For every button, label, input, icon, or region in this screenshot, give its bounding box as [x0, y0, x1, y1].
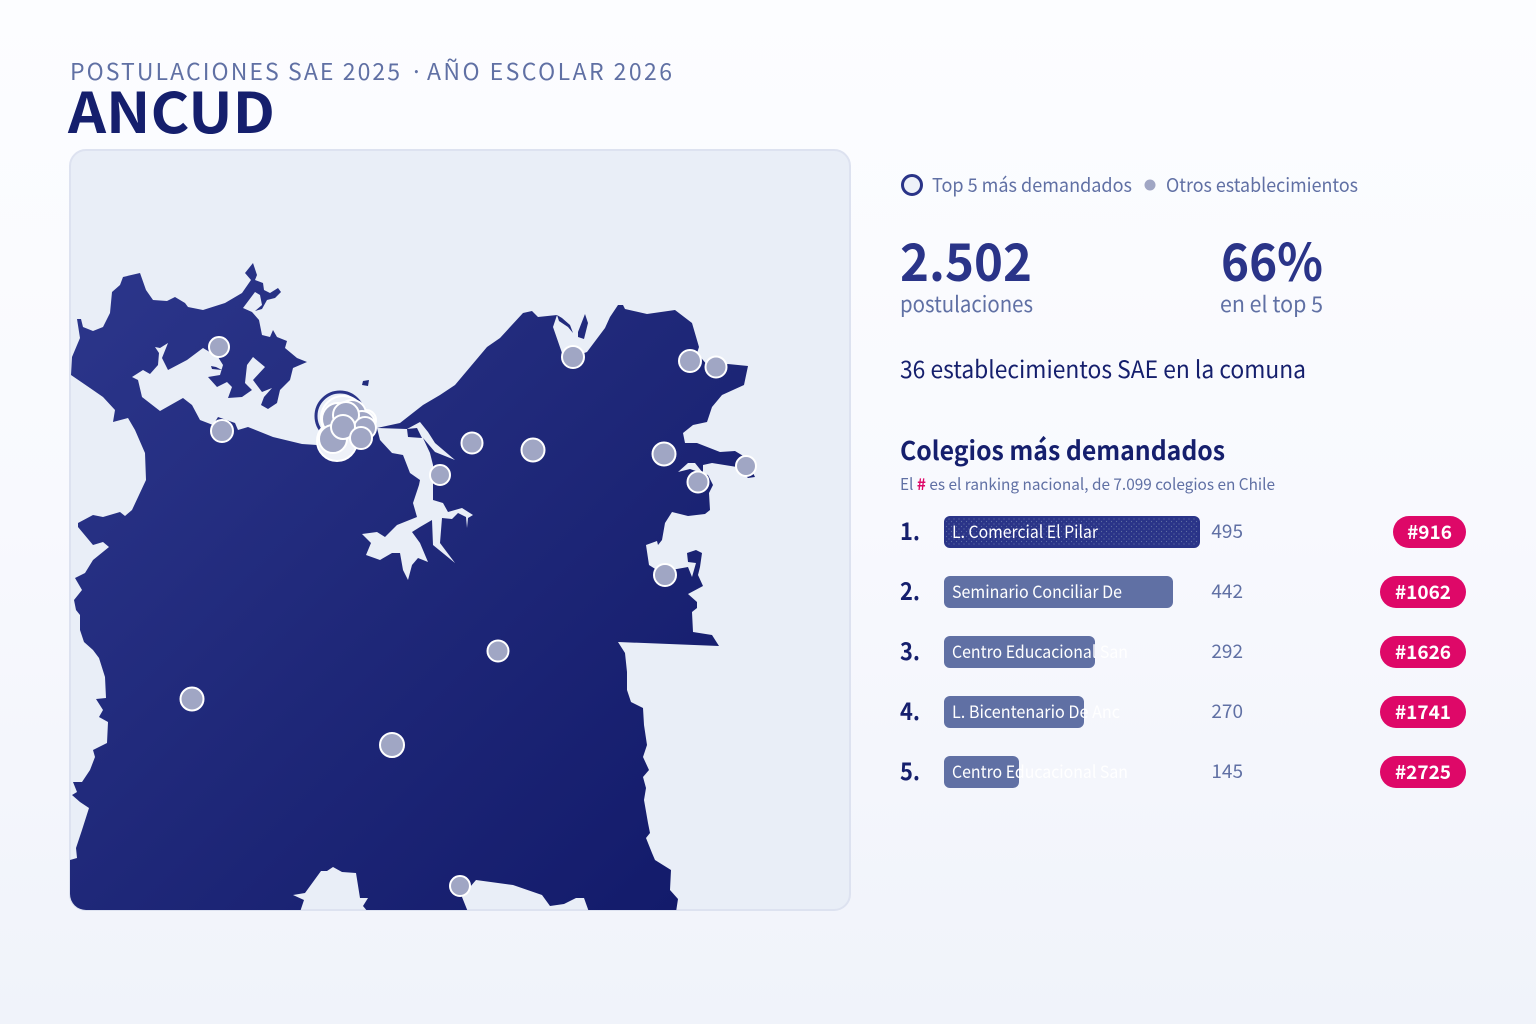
row 4: 270	[1211, 697, 1243, 724]
row 5: 145	[1211, 757, 1243, 784]
legend: other label: Otros establecimientos	[1166, 171, 1358, 198]
row 1: 495	[1211, 517, 1243, 544]
row 1: L. Comercial El Pilar	[952, 518, 1098, 543]
row 2: Seminario Conciliar De	[952, 578, 1122, 603]
establishments count: 36 establecimientos SAE en la comuna	[900, 350, 1306, 385]
panel: map	[70, 150, 850, 912]
subtitle: ·	[410, 53, 423, 87]
row 2: 2.	[900, 572, 920, 607]
row 2: #1062	[1395, 578, 1451, 605]
subtitle: POSTULACIONES SAE 2025	[70, 53, 400, 87]
legend	[902, 171, 1358, 198]
row 4: 4.	[900, 692, 920, 727]
map: pins for other schools	[180, 337, 756, 896]
map: comuna land area	[70, 263, 755, 912]
map: small north islands	[211, 314, 588, 386]
row 4: L. Bicentenario De Anc	[952, 698, 1120, 723]
row 3: #1626	[1395, 638, 1451, 665]
ranking note: El # es el ranking nacional, de 7.099 colegios en Chile	[900, 471, 1275, 495]
subtitle: AÑO ESCOLAR 2026	[427, 53, 672, 87]
row 1	[900, 512, 1466, 548]
row 1: 1.	[900, 512, 920, 547]
title: ANCUD	[67, 69, 275, 150]
row 3: 3.	[900, 632, 920, 667]
row 4	[900, 692, 1466, 728]
row 2: 442	[1211, 577, 1243, 604]
stat: top 5 share: en el top 5	[1220, 287, 1323, 319]
row 5: Centro Educacional San	[952, 758, 1128, 783]
row 3: Centro Educacional San	[952, 638, 1128, 663]
row 3	[900, 632, 1466, 668]
row 5: #2725	[1395, 758, 1451, 785]
legend: top 5 marker	[902, 176, 922, 194]
row 3: 292	[1211, 637, 1243, 664]
stat: applications: 2.502	[900, 221, 1032, 296]
row 4: #1741	[1395, 698, 1451, 725]
map: estuary water	[362, 422, 473, 580]
map: small island in estuary	[407, 428, 422, 438]
stat: applications: postulaciones	[900, 287, 1033, 319]
legend: other marker	[1144, 180, 1156, 190]
subtitle	[70, 53, 672, 87]
legend: top 5 label: Top 5 más demandados	[932, 171, 1132, 198]
section heading: Colegios más demandados	[900, 431, 1225, 468]
map: top 5 school cluster	[316, 392, 376, 461]
row 5: 5.	[900, 752, 920, 787]
row 5	[900, 752, 1466, 788]
row 1: #916	[1407, 518, 1452, 545]
row 2	[900, 572, 1466, 608]
stat: top 5 share: 66%	[1221, 221, 1323, 296]
